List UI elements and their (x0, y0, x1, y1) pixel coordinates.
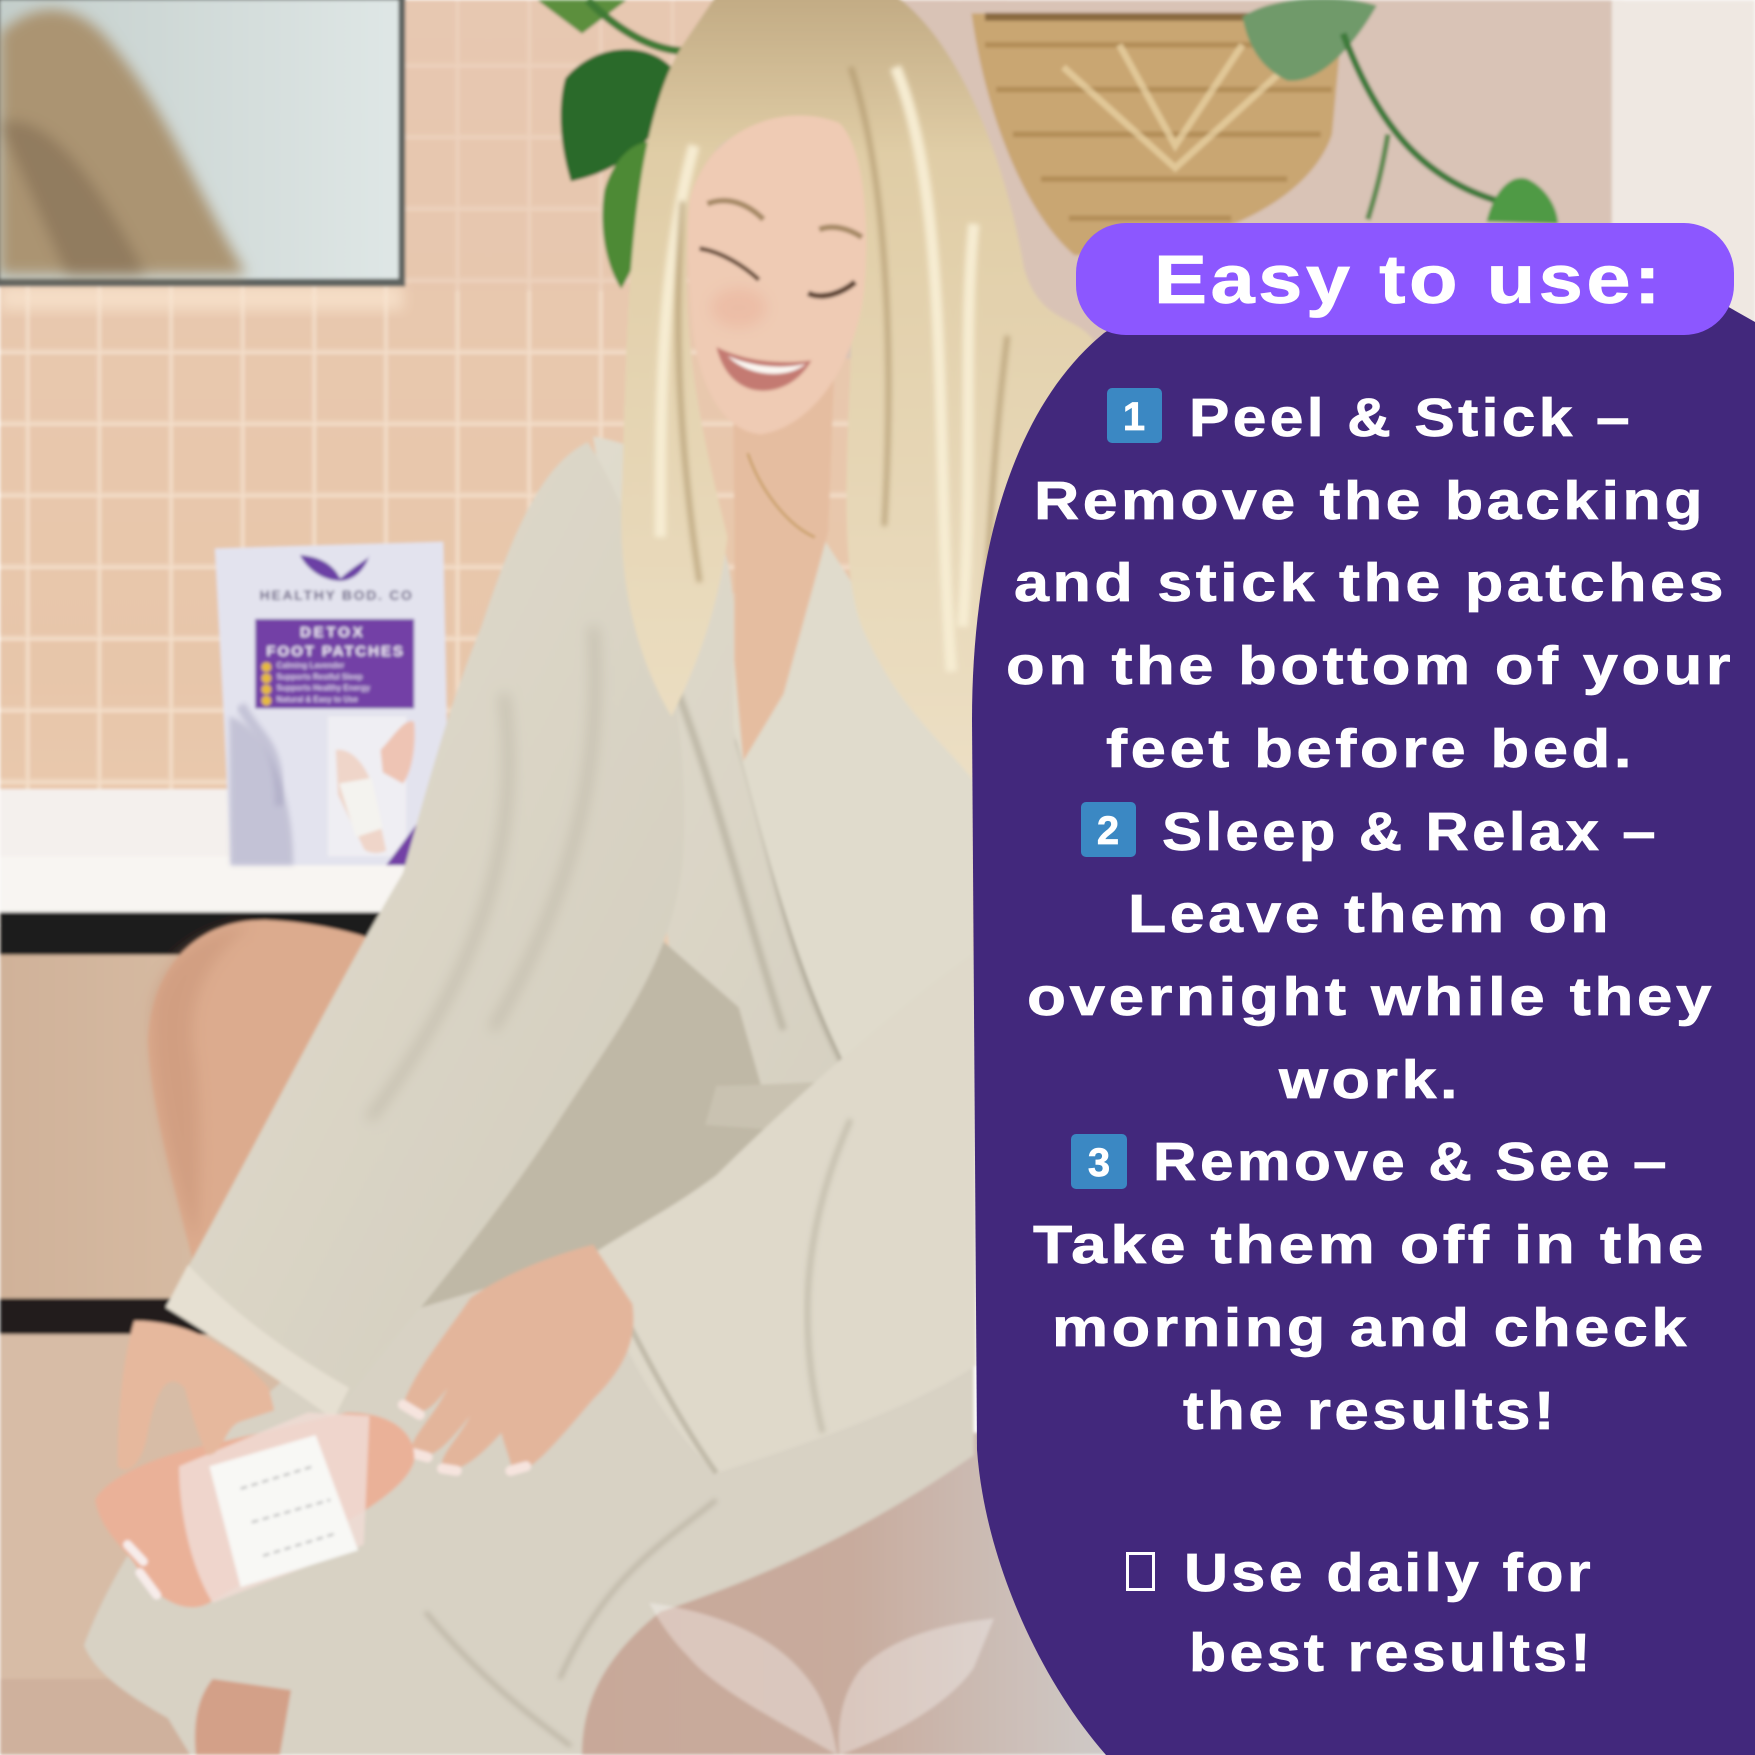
step 1 text: on the bottom of your (1006, 636, 1734, 696)
bag brand: HEALTHY BOD. CO (260, 587, 412, 603)
step 2 text: overnight while they (1027, 967, 1715, 1027)
logo watermark (649, 1603, 994, 1755)
foot with patch (95, 1413, 414, 1607)
icon: keycap 2: 2 (1097, 809, 1119, 853)
step 2 text: Leave them on (1128, 884, 1612, 944)
bag purple label: Supports Restful Sleep (276, 672, 363, 681)
icon: keycap 1 (1107, 388, 1162, 443)
closing note text (1184, 1543, 1594, 1683)
necklace (748, 453, 815, 537)
lower robe and lap (84, 1256, 974, 1755)
shadow under the arm (414, 929, 784, 1310)
bag logo (300, 555, 370, 581)
step 3 text: the results! (1183, 1381, 1558, 1441)
bag purple label: DETOX (300, 624, 363, 641)
sleeve holding the foot (166, 442, 684, 1419)
tiled wall (0, 0, 1007, 963)
hanging basket (972, 13, 1343, 255)
step 3 (1033, 1132, 1707, 1441)
hand on foot (118, 1321, 274, 1470)
closing note (1128, 1543, 1594, 1683)
step 1 text: Remove the backing (1034, 471, 1706, 531)
bag purple label: Supports Healthy Energy (276, 684, 371, 693)
bag corner strip (386, 778, 451, 865)
step 1 text: and stick the patches (1014, 553, 1727, 613)
step 3 text: Take them off in the (1033, 1215, 1707, 1275)
icon: keycap 3: 3 (1088, 1141, 1110, 1185)
step 2 text: Sleep & Relax – (1162, 802, 1659, 862)
panel: instructions background (972, 240, 1755, 1755)
mirror (0, 0, 405, 287)
bent leg (148, 920, 392, 1310)
counter and cabinet (0, 789, 492, 1755)
robe torso (414, 437, 974, 1321)
step 1 text (1006, 388, 1734, 779)
hanging plant (537, 0, 1558, 289)
step 2 text (1027, 802, 1715, 1110)
bag foot picture (328, 716, 415, 856)
heading text: Easy to use: (1154, 241, 1664, 318)
bag purple label: FOOT PATCHES (266, 643, 403, 660)
icon: keycap 2 (1081, 802, 1136, 857)
step 3 text: morning and check (1052, 1298, 1690, 1358)
resting hand (403, 1245, 633, 1472)
sleeve near the hand (593, 951, 976, 1473)
icon: keycap 1: 1 (1123, 395, 1145, 439)
step 1 (1006, 388, 1734, 779)
bare lower leg (195, 1679, 291, 1755)
step 2 (1027, 802, 1715, 1110)
upper right wall (716, 0, 1755, 358)
icon: keycap 3 (1071, 1134, 1127, 1189)
bag purple label (255, 619, 414, 709)
bag purple label: Natural & Easy to Use (276, 695, 358, 704)
step 1 text: Peel & Stick – (1189, 388, 1633, 448)
blonde hair (621, 0, 1095, 784)
step 3 text (1033, 1132, 1707, 1441)
bag purple label: Calming Lavender (276, 661, 344, 670)
icon: missing glyph box (1128, 1554, 1154, 1590)
closing note text: best results! (1189, 1623, 1594, 1683)
product bag (215, 542, 451, 865)
heading pill (1076, 223, 1734, 335)
closing note text: Use daily for (1184, 1543, 1594, 1603)
floor and lower background (224, 1433, 1119, 1755)
step 3 text: Remove & See – (1153, 1132, 1670, 1192)
face (688, 116, 866, 434)
neck and chest (733, 381, 834, 761)
shaded leg edge (152, 925, 252, 1242)
step 1 text: feet before bed. (1106, 719, 1635, 779)
step 2 text: work. (1278, 1050, 1461, 1110)
